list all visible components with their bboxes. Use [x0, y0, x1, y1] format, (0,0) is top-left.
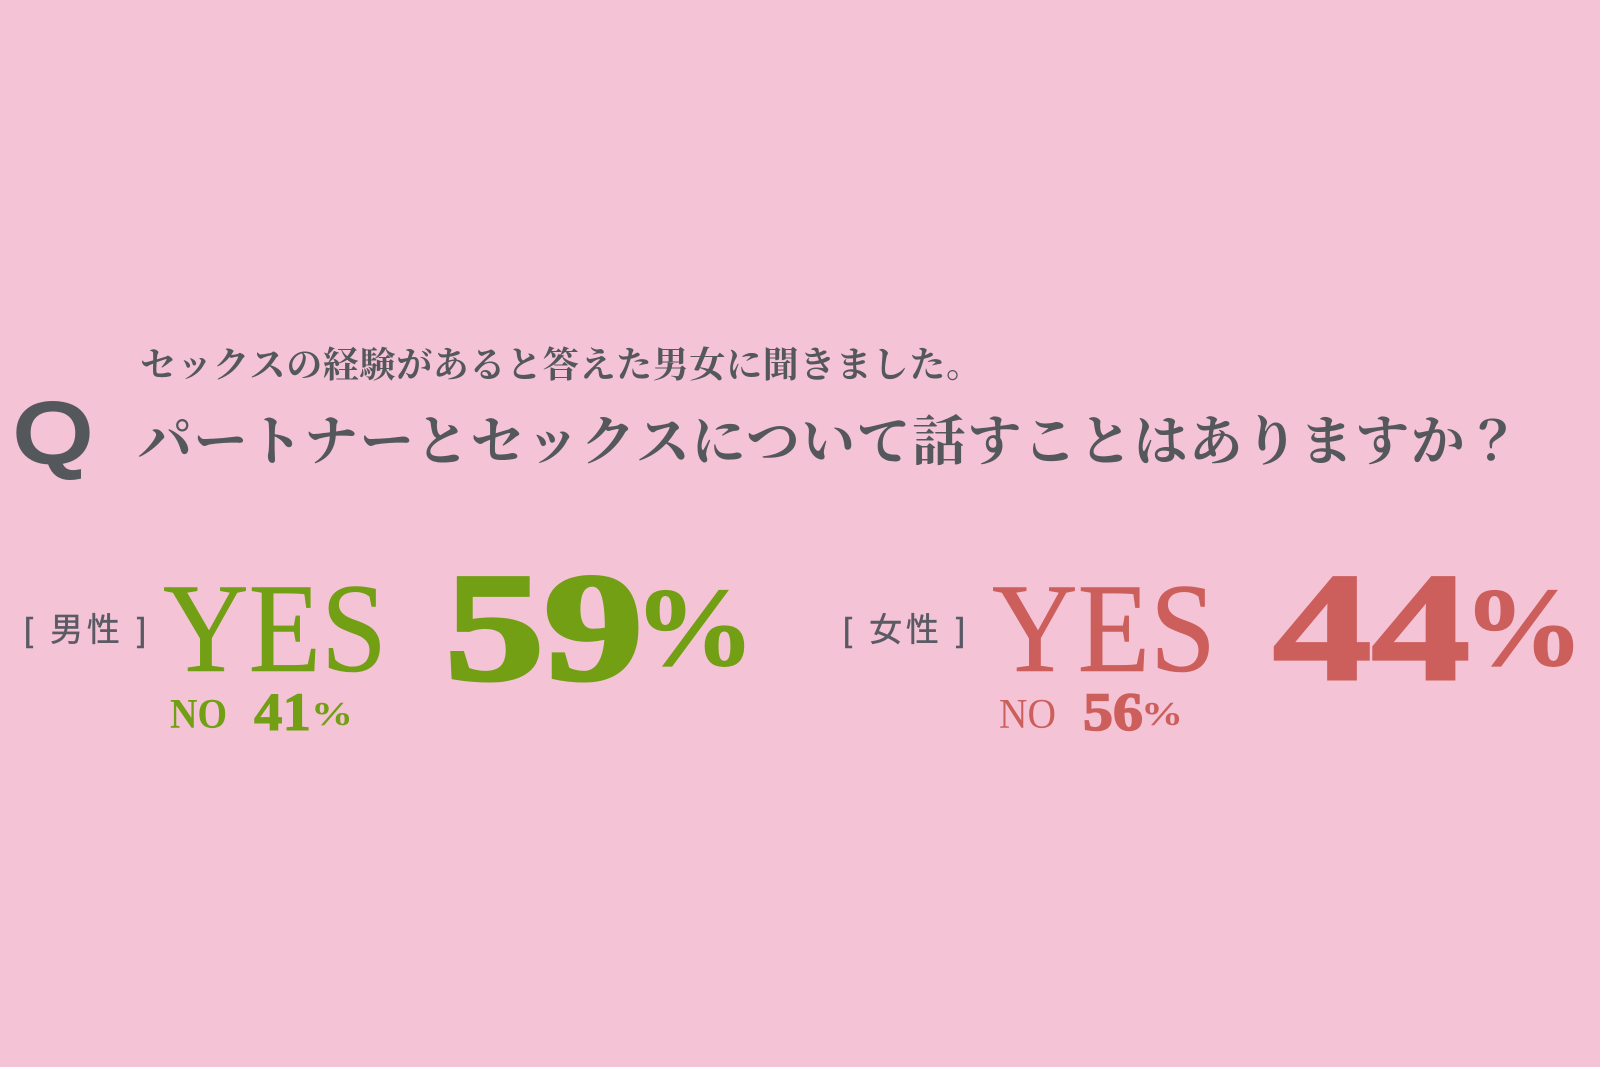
men NO percent sign: % — [311, 696, 353, 733]
women YES word: YES — [992, 559, 1216, 699]
icon: Q mark: Q — [14, 386, 92, 480]
women label: [ 女性 ] — [843, 611, 965, 648]
men NO percentage: 41 — [254, 682, 311, 742]
men YES percentage: 59 — [445, 543, 643, 713]
women NO word: NO — [999, 692, 1056, 738]
women YES percent sign: % — [1463, 566, 1584, 690]
intro text: セックスの経験があると答えた男女に聞きました。 — [140, 345, 982, 385]
men YES percent sign: % — [634, 566, 755, 690]
men NO word: NO — [170, 692, 227, 738]
women YES percentage: 44 — [1273, 543, 1470, 713]
women NO percentage: 56 — [1083, 682, 1143, 742]
men YES word: YES — [163, 559, 387, 699]
panel: men result — [24, 543, 755, 742]
men label: [ 男性 ] — [24, 611, 146, 648]
women NO percent sign: % — [1141, 696, 1183, 733]
question heading: パートナーとセックスについて話すことはありますか？ — [138, 412, 1520, 472]
panel: women result — [843, 543, 1584, 742]
